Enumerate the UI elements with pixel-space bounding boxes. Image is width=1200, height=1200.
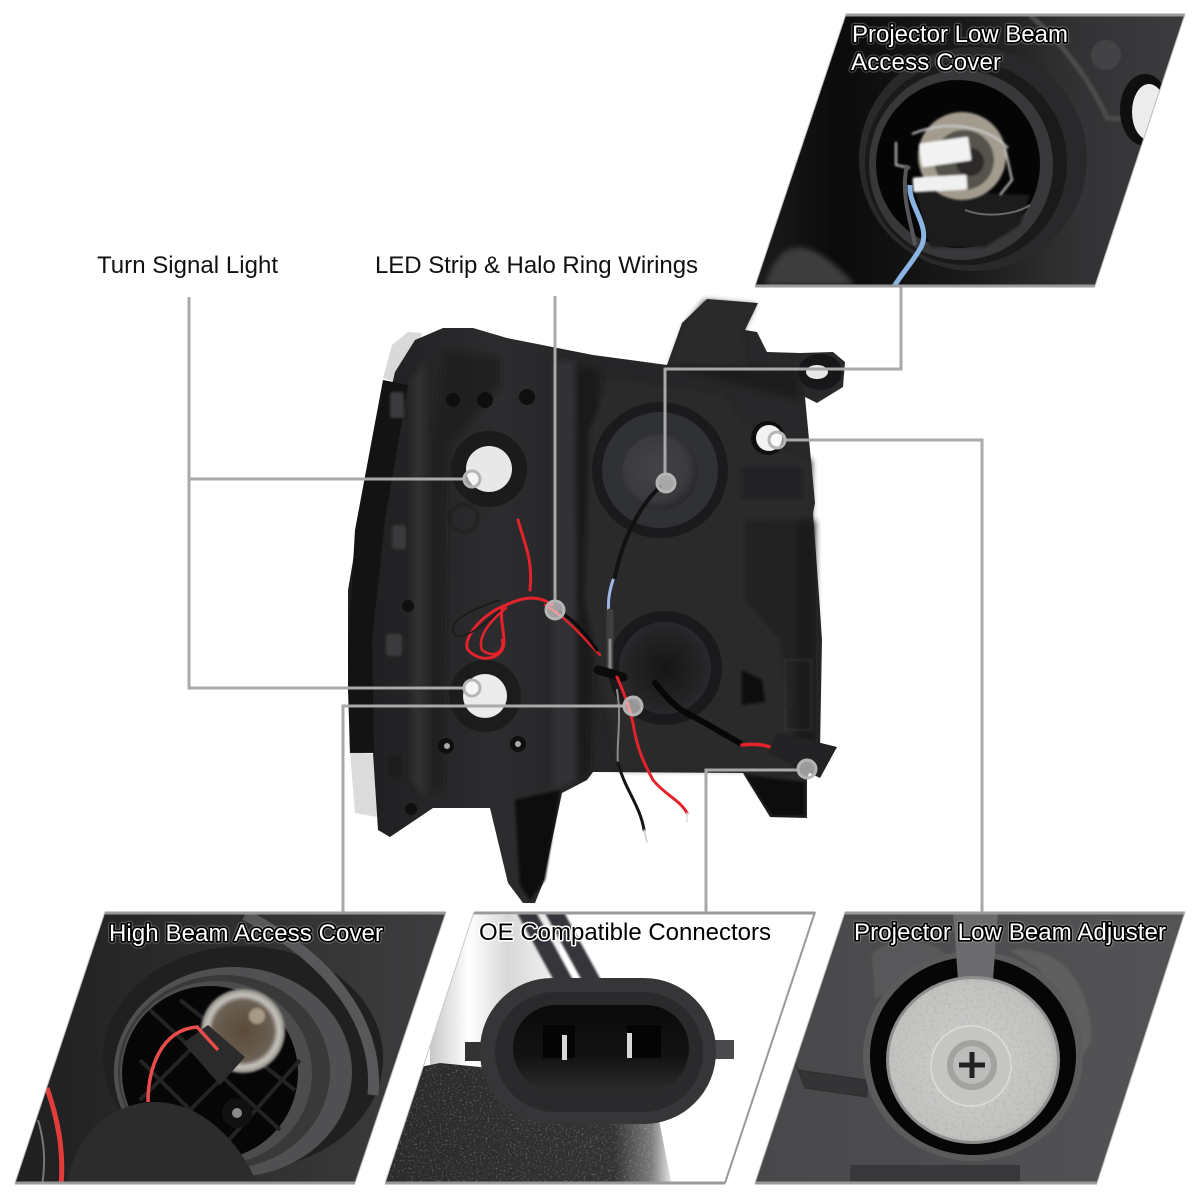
- red wire: [148, 1027, 218, 1102]
- panel title: Projector Low Beam: [852, 21, 1068, 48]
- soft highlights: [765, 248, 855, 285]
- foam seal strip: [348, 380, 408, 752]
- panel subtitle: Access Cover: [851, 49, 1001, 76]
- upper projector dust cap: [592, 402, 728, 538]
- main headlight rear view: [348, 299, 845, 903]
- panel title: Projector Low Beam Adjuster: [854, 919, 1166, 946]
- connector cables: [524, 908, 594, 985]
- mounting bracket ring: [798, 354, 842, 390]
- panel title: High Beam Access Cover: [109, 920, 383, 947]
- leader line: high beam cover: [343, 697, 642, 912]
- leader line: LED wirings: [546, 296, 564, 619]
- connector body: [465, 978, 734, 1124]
- callout label: turn signal light: Turn Signal Light: [97, 252, 278, 279]
- bulb socket: [896, 112, 1012, 200]
- screw: [222, 1098, 252, 1128]
- callout label: LED strip and halo ring wirings: LED Strip & Halo Ring Wirings: [375, 252, 698, 279]
- rubber cap: [67, 1102, 258, 1186]
- housing details: [412, 300, 816, 800]
- bulb: [201, 989, 285, 1073]
- upper right housing curve: [1028, 16, 1121, 122]
- lower high beam dust cap: [608, 611, 722, 725]
- leader line: connectors: [706, 760, 816, 912]
- leader line: low beam cover: [657, 287, 901, 492]
- panel: projector low beam adjuster: [750, 910, 1190, 1186]
- housing body: [348, 299, 845, 903]
- left red wire: [47, 1088, 62, 1186]
- leader lines: turn signal: [189, 297, 480, 696]
- leader line: low beam adjuster: [769, 432, 982, 912]
- panel: projector low beam access cover: [750, 10, 1190, 290]
- gray and blue wires: [905, 165, 915, 245]
- ring around bulb: [859, 47, 1087, 271]
- wiring harness: [453, 487, 770, 842]
- panel: OE compatible connectors: [380, 908, 820, 1186]
- black recess: [863, 951, 1083, 1161]
- housing rings: [103, 946, 383, 1177]
- panel: high beam access cover: [10, 910, 450, 1186]
- headlight clear corners: [350, 332, 422, 817]
- wire plug: [183, 1025, 245, 1085]
- adjuster knob: [751, 421, 785, 455]
- left wires: [38, 1120, 44, 1186]
- adjuster disk: [885, 975, 1061, 1144]
- table surface: [380, 1063, 672, 1186]
- top stem: [953, 912, 998, 980]
- phillips screw: [959, 1052, 985, 1078]
- turn signal access holes: [449, 431, 527, 732]
- panel title: OE Compatible Connectors: [479, 919, 771, 946]
- screws: [402, 389, 535, 815]
- grid behind: [140, 1000, 300, 1150]
- wire connector plug: [768, 732, 837, 778]
- side hole: [1120, 74, 1162, 146]
